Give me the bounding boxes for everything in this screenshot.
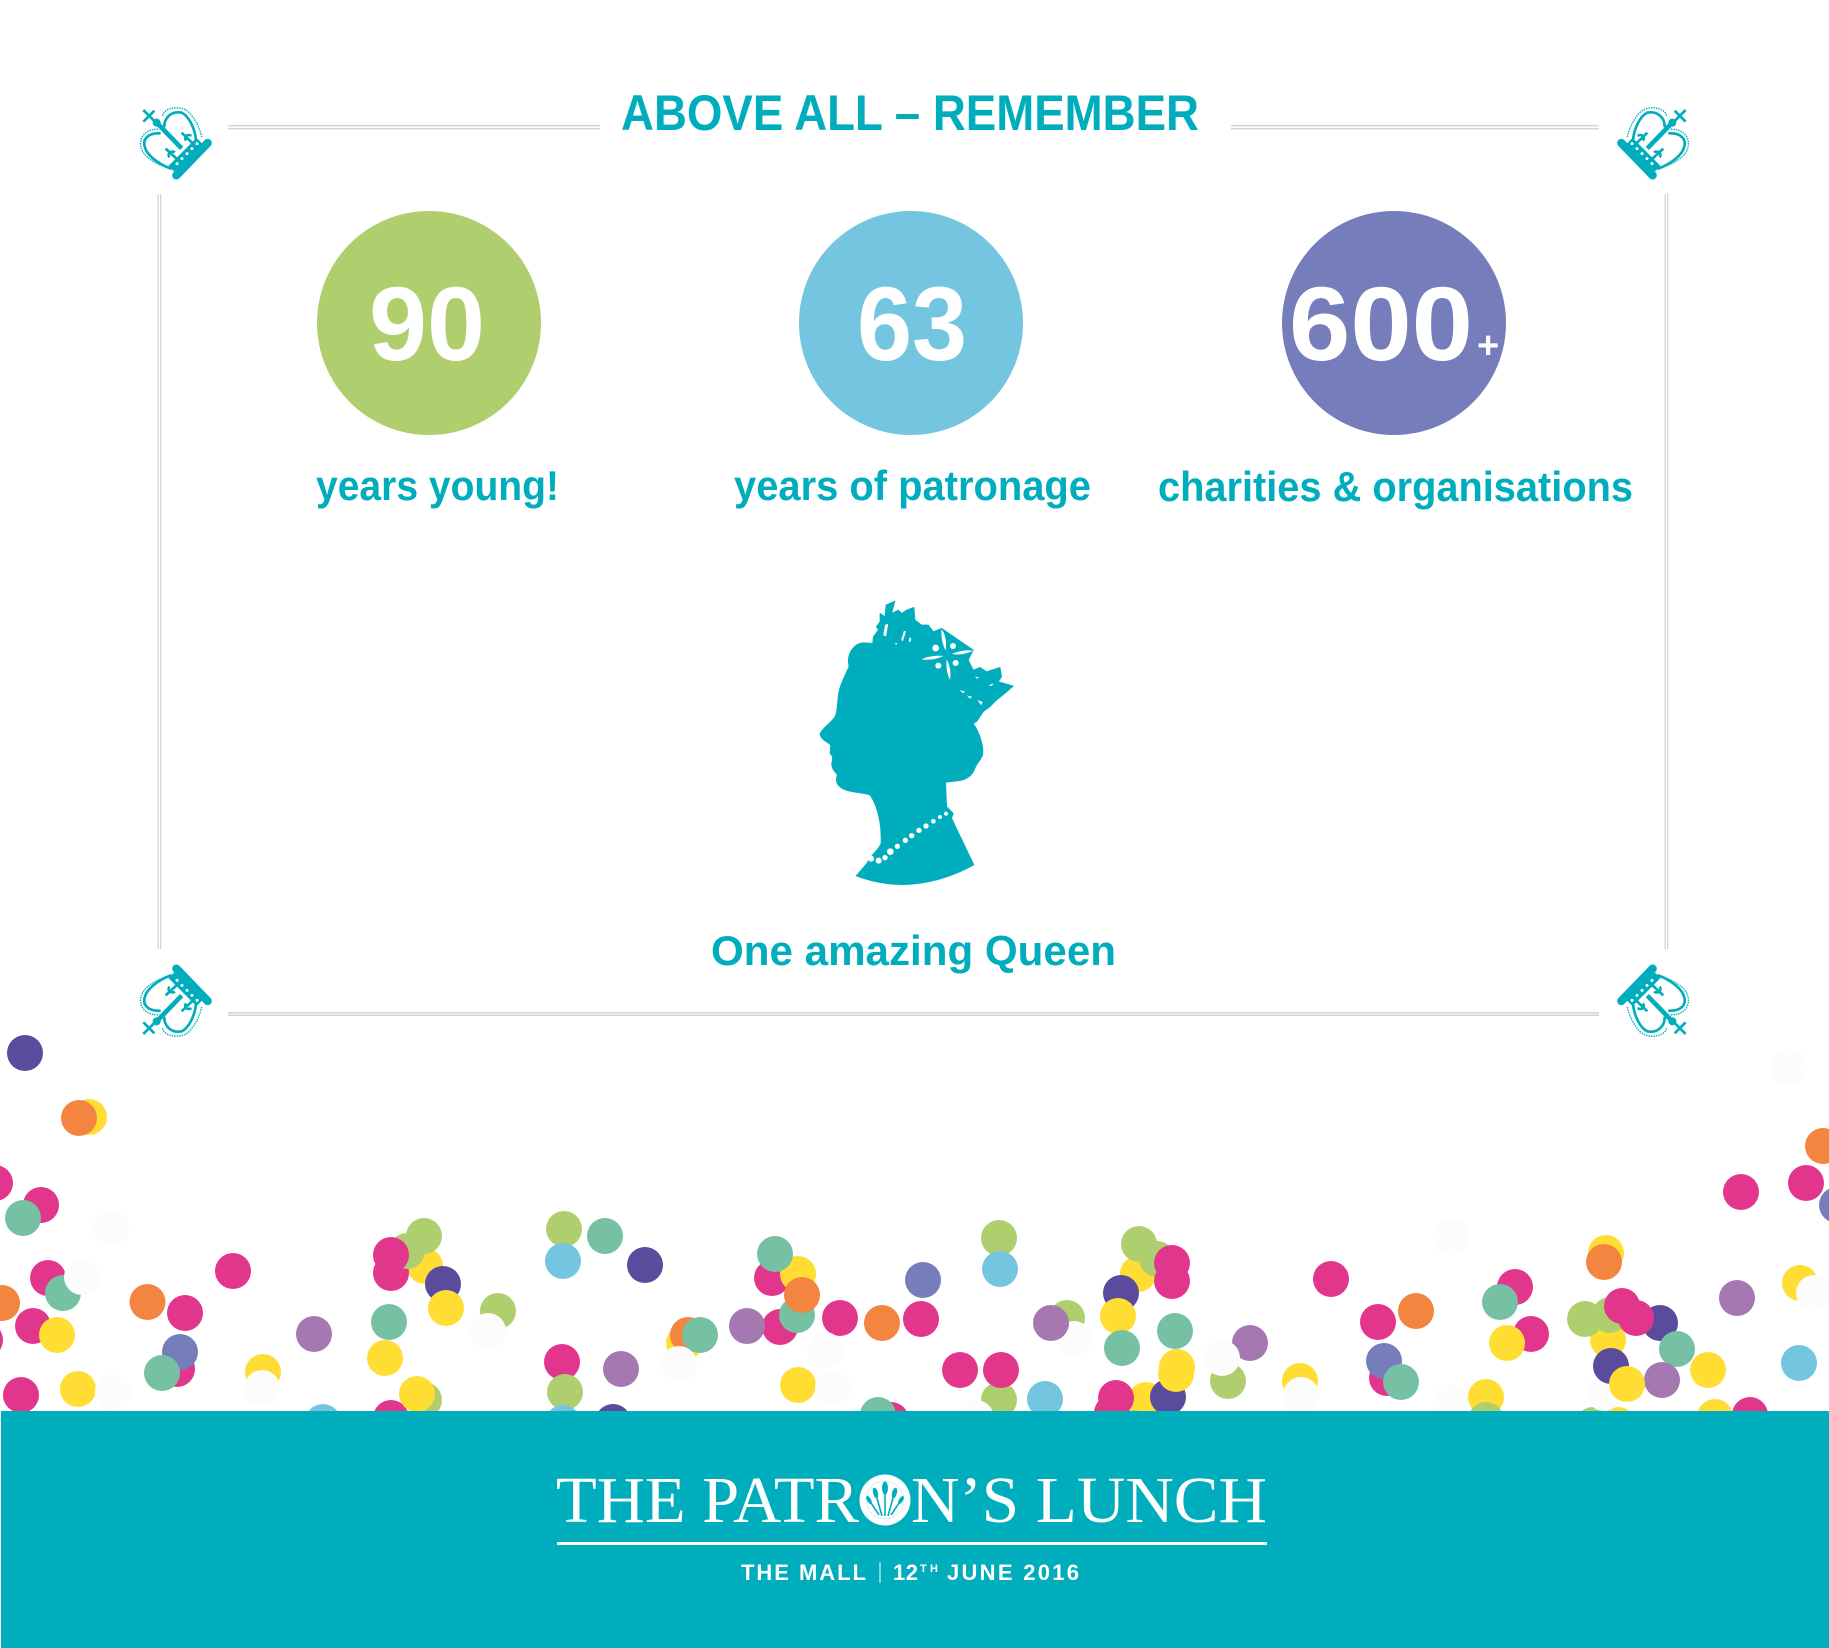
logo text right: N’S LUNCH (911, 1464, 1267, 1537)
date superscript: TH (920, 1563, 938, 1575)
logo letter O: O (862, 1464, 910, 1537)
footer banner (1, 1411, 1829, 1648)
title: ABOVE ALL – REMEMBER (621, 85, 1199, 141)
logo rule (557, 1542, 1267, 1545)
number: 600: 600 (1289, 266, 1473, 383)
stat: 600+ charities and organisations (1158, 211, 1633, 510)
plus sign: + (1477, 325, 1499, 367)
number: 90: 90 (369, 266, 485, 383)
icon: spoon emblem (860, 1474, 910, 1526)
frame: ornamental border lines (158, 125, 1668, 1016)
logo text left: THE PATR (556, 1464, 859, 1537)
confetti dots (0, 1035, 1829, 1446)
event details (741, 1560, 1079, 1585)
date month and year: JUNE 2016 (947, 1560, 1079, 1585)
circle: blue (799, 211, 1023, 435)
icon: crown top right (1621, 108, 1688, 175)
circle: green (317, 211, 541, 435)
icon: Queen silhouette (820, 601, 1013, 885)
venue: THE MALL (741, 1560, 866, 1585)
circle: periwinkle (1282, 211, 1506, 435)
label: years young: years young! (316, 462, 559, 509)
stat: 90 years young (316, 211, 559, 509)
icon: crown bottom left (141, 969, 208, 1036)
logo: The Patron's Lunch (556, 1464, 1267, 1545)
label: One amazing Queen: One amazing Queen (711, 927, 1116, 974)
date: 12 (893, 1560, 918, 1585)
separator (880, 1562, 881, 1583)
number: 63: 63 (857, 266, 967, 383)
stat: 63 years of patronage (734, 211, 1091, 509)
label: charities and organisations: charities & organisations (1158, 463, 1633, 510)
icon: crown bottom right (1621, 969, 1688, 1036)
label: years of patronage: years of patronage (734, 462, 1091, 509)
icon: crown top left (141, 108, 208, 175)
